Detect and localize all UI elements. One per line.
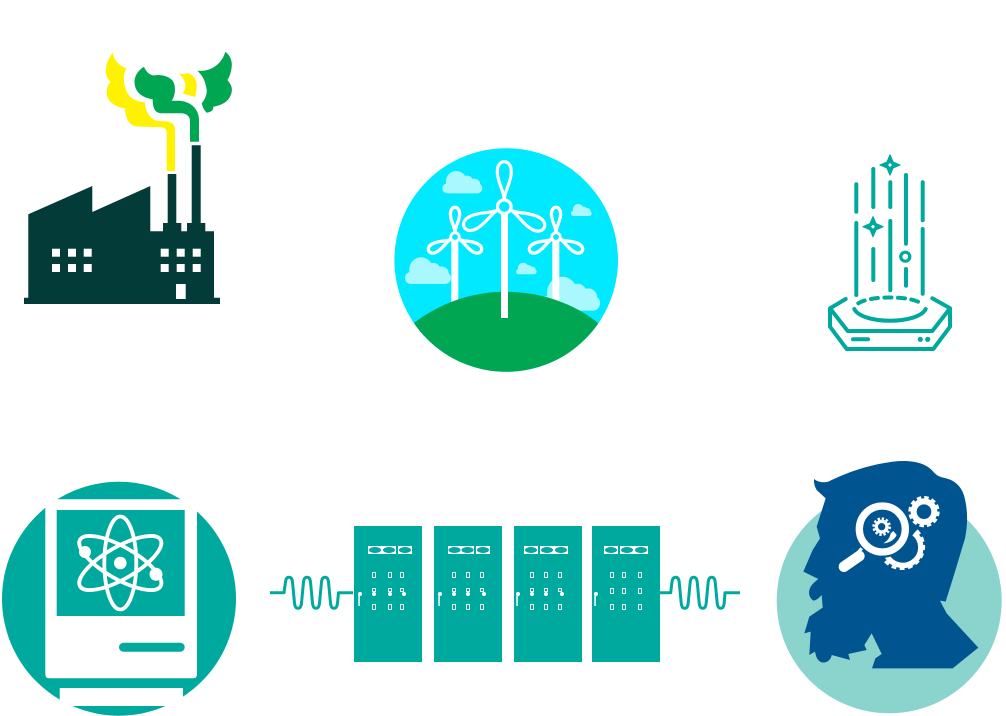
icon: wind turbines on a hill [394, 148, 618, 380]
icon: head with gears and magnifier [777, 461, 1002, 713]
cabinet 3 handle [516, 592, 520, 606]
cabinet 2 switch knobs [452, 592, 486, 596]
sparkle centers [871, 163, 892, 229]
cabinet 4 [592, 526, 660, 662]
cabinet 2 display [448, 546, 490, 554]
base dots [918, 337, 930, 342]
icon: atomic computer [2, 482, 236, 716]
base slot [853, 337, 868, 341]
cabinet 3 switches [530, 572, 562, 610]
smoke: yellow plume [106, 53, 175, 171]
large turbine [461, 162, 547, 318]
gear in lens [874, 519, 890, 535]
cabinet 4 handle [594, 592, 598, 606]
cabinet 2 handle [438, 592, 442, 606]
lens arrow detail [883, 531, 897, 543]
smoke: small yellow puff [178, 73, 197, 97]
partial gear [884, 531, 923, 568]
small turbine left [427, 207, 483, 303]
computer body [45, 499, 197, 678]
cabinet 3 [514, 526, 582, 662]
icon: factory with smoke [24, 52, 232, 304]
smoke: green plume [134, 67, 199, 142]
magnifier [844, 506, 905, 567]
pale teal circle [777, 488, 1002, 713]
right signal wave [660, 577, 740, 608]
cabinet 1 switches [372, 572, 404, 610]
light beams [856, 169, 923, 295]
smoke: right green puff [197, 52, 232, 113]
projected ring dashed [858, 297, 921, 303]
large gear top right [910, 498, 938, 525]
icon: hologram projector [830, 155, 950, 349]
sky circle [394, 148, 618, 372]
small ring [901, 252, 910, 261]
factory windows and door [52, 249, 201, 299]
cabinet 3 switch knobs [530, 592, 564, 596]
sparkles [863, 155, 900, 237]
head silhouette [803, 461, 978, 668]
cabinet 4 switches [610, 572, 642, 610]
cabinet 4 display [604, 546, 648, 554]
teal circle [2, 482, 236, 716]
cabinet 1 handle [358, 592, 362, 606]
disk slot [119, 643, 185, 652]
screen [57, 510, 185, 616]
green hill [414, 292, 598, 380]
cabinet 3 display [524, 546, 568, 554]
cabinet 1 display [368, 546, 412, 554]
computer foot [60, 688, 183, 706]
cabinet 1 [354, 526, 422, 662]
clouds [405, 171, 600, 311]
cabinet 2 [434, 526, 502, 662]
cabinet 1 switch knobs [372, 592, 406, 596]
factory silhouette [24, 145, 220, 304]
projected ring solid [854, 309, 926, 321]
cabinet 2 switches [452, 572, 484, 610]
left signal wave [270, 577, 353, 608]
small turbine right [528, 207, 584, 303]
atom symbol [72, 516, 169, 610]
projector base [830, 298, 950, 349]
